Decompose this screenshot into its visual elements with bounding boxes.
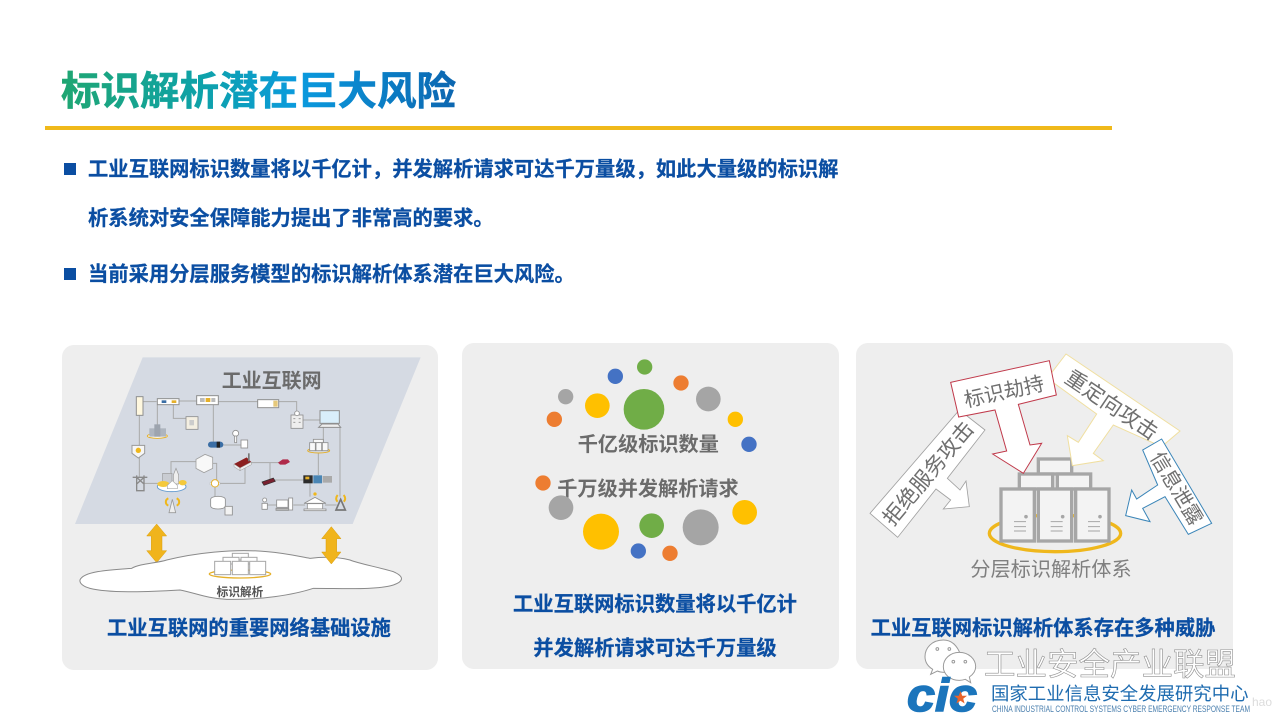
bullet one text: 析系统对安全保障能力提出了非常高的要求。 [88, 206, 494, 230]
panel background [462, 343, 839, 669]
icon: smart town [157, 468, 187, 492]
threat diagram [870, 354, 1212, 581]
cloud label: 标识解析 [217, 585, 264, 599]
panel background [856, 343, 1233, 669]
panel: threats [856, 343, 1233, 669]
arrow: right bidirectional [322, 527, 341, 564]
icon: antenna signal [166, 498, 179, 513]
arrow: identity hijack: 标识劫持 [962, 372, 1046, 412]
panel caption second line: 并发解析请求可达千万量级 [533, 637, 777, 660]
label: ten million requests: 千万级并发解析请求 [557, 477, 739, 500]
title: 标识解析潜在巨大风险 [61, 70, 456, 114]
logo: CIC [907, 669, 977, 720]
icon: database [211, 496, 232, 515]
icon: layered servers [1001, 459, 1109, 541]
panel caption: 工业互联网的重要网络基础设施 [107, 616, 391, 640]
arrow: denial of service: 拒绝服务攻击 [878, 417, 979, 530]
icon: city buildings [147, 424, 167, 438]
icon: server block [196, 454, 213, 473]
bullet one marker [64, 163, 76, 175]
icon: dark vehicle [262, 478, 275, 485]
icon: valve tower [133, 475, 147, 491]
icon: wechat bubbles [925, 640, 976, 683]
organisation name: 国家工业信息安全发展研究中心 [991, 683, 1248, 704]
bubble graphic [535, 359, 757, 561]
title underline [45, 126, 1112, 130]
network connection lines [139, 401, 340, 505]
icon: red factory [234, 453, 251, 471]
label: layered system: 分层标识解析体系 [970, 558, 1132, 581]
arrow: redirect attack [1047, 354, 1180, 466]
bullet two marker [64, 268, 76, 280]
icon: hospital building [291, 411, 303, 428]
faint watermark: hao [1252, 695, 1272, 709]
arrow: left bidirectional [147, 524, 167, 563]
arrow: information leak [1126, 439, 1212, 534]
logo star [954, 691, 967, 704]
icon: key and note [233, 430, 248, 448]
panel caption: 工业互联网标识数量将以千亿计 [513, 593, 797, 616]
icon: network nodes top row [136, 396, 279, 415]
icon: worker at computer [262, 498, 293, 510]
icon: radio tower [336, 495, 345, 510]
icon: blue capsule [208, 442, 223, 448]
panel background [62, 345, 438, 670]
icon: hub node [210, 480, 220, 487]
arrow: identity hijack [951, 361, 1056, 473]
icon: cube device [186, 417, 198, 429]
diagram: industrial internet plane and resolution cloud [75, 357, 421, 599]
arrow: information leak: 信息泄露 [1145, 448, 1207, 529]
arrow: redirect attack: 重定向攻击 [1061, 366, 1162, 445]
icon: computer monitor [319, 411, 341, 427]
upper bubbles [547, 359, 757, 452]
bullet two text: 当前采用分层服务模型的标识解析体系潜在巨大风险。 [88, 262, 575, 286]
bullet one text: 工业互联网标识数量将以千亿计，并发解析请求可达千万量级，如此大量级的标识解 [88, 158, 838, 181]
icon: government building [304, 492, 326, 511]
icon: location shield [132, 445, 145, 458]
server ring [989, 515, 1121, 552]
parallelogram plane [75, 357, 421, 524]
label: hundred billion identifiers: 千亿级标识数量 [578, 433, 719, 456]
logo letters: cic [907, 669, 977, 720]
panel: infrastructure [62, 345, 438, 670]
plane heading: 工业互联网 [222, 369, 322, 392]
icon: gold-ringed towers [308, 439, 330, 453]
lower bubbles [535, 475, 757, 561]
panel caption: 工业互联网标识解析体系存在多种威胁 [871, 617, 1215, 640]
cloud [80, 551, 401, 599]
panel: scale [462, 343, 839, 669]
watermark account name: 工业安全产业联盟 [984, 646, 1236, 682]
icon: red car [278, 459, 290, 465]
icon: control strip [303, 475, 332, 483]
bullet text block [64, 158, 838, 286]
icon: resolution servers [209, 553, 271, 578]
